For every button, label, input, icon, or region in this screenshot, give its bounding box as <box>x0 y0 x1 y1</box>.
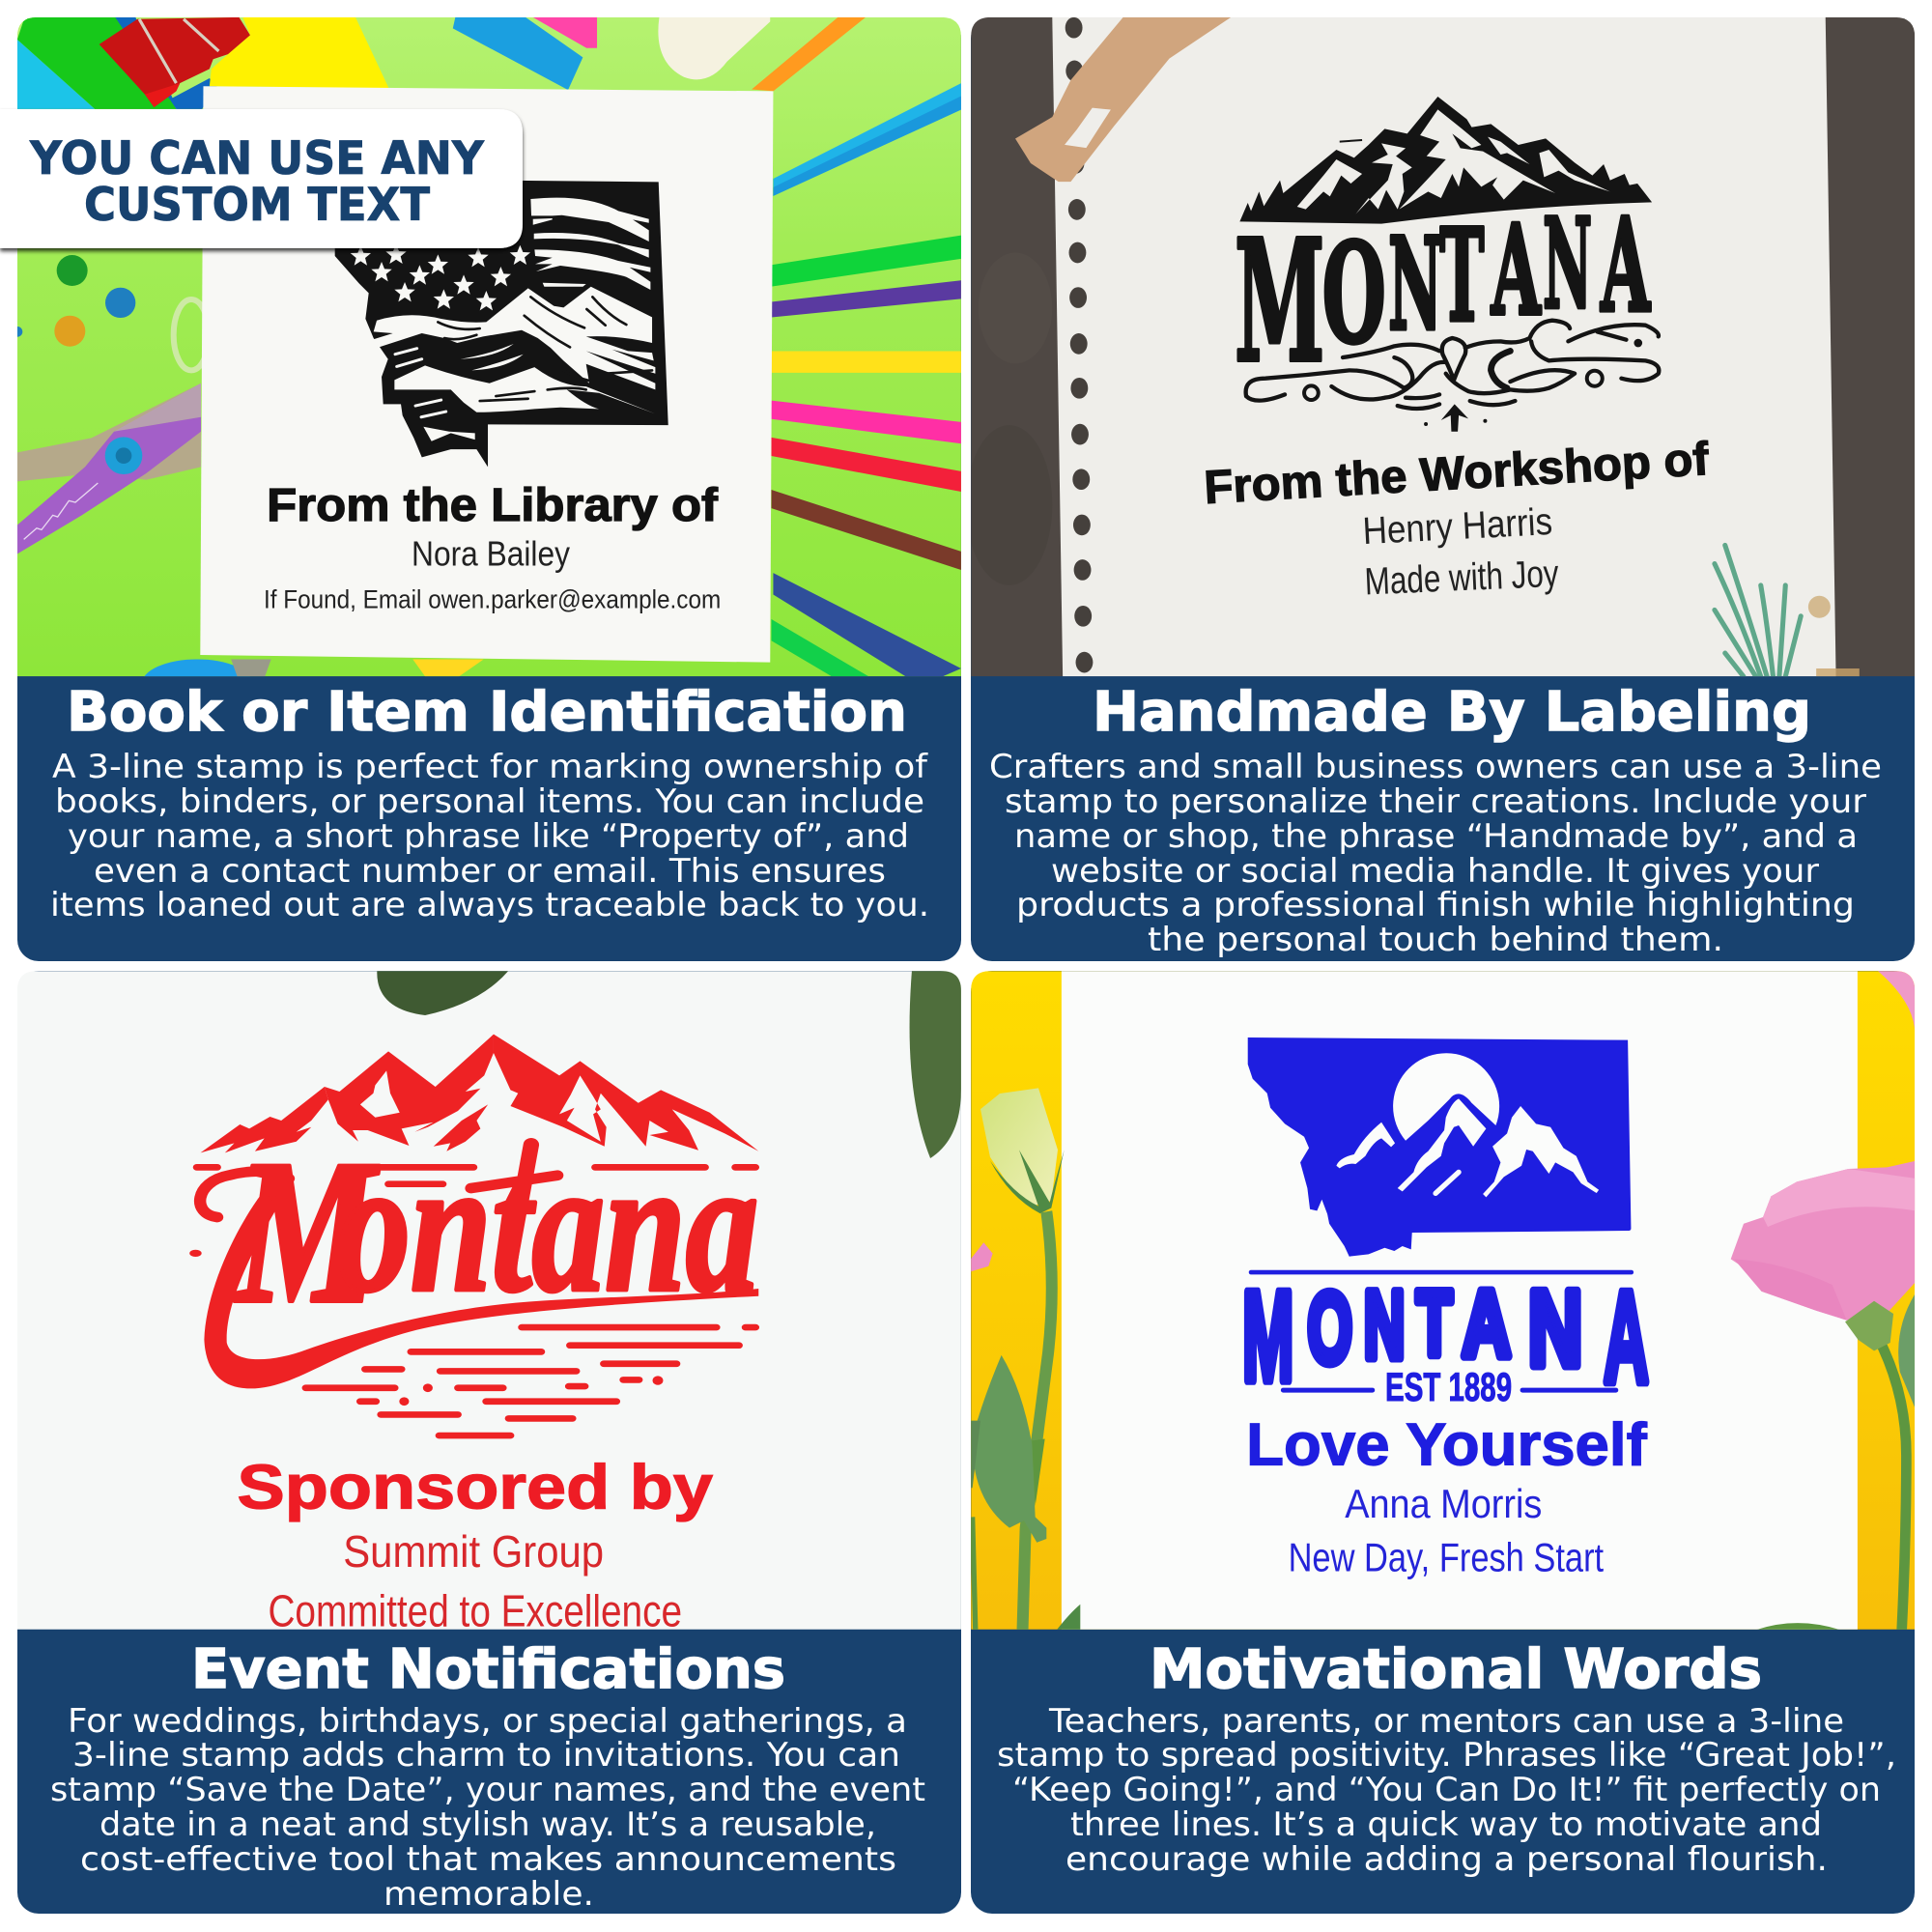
photo: white paper with red Montana stamp: Summit Group <box>343 1526 604 1577</box>
photo: notebook paper with black Montana stamp: A <box>1491 198 1542 344</box>
photo: white paper with red Montana stamp <box>17 971 961 1636</box>
photo: notebook paper with black Montana stamp: O <box>1322 213 1386 374</box>
heading: Motivational Words: Motivational Words <box>1150 1638 1762 1701</box>
photo: white paper with red Montana stamp: M <box>234 1118 380 1347</box>
photo: paper on yellow with flowers and blue Montana stamp: Love Yourself <box>1246 1412 1647 1479</box>
photo: notebook paper with black Montana stamp: N <box>1388 210 1442 359</box>
photo: white paper with red Montana stamp: Committed to Excellence <box>268 1586 682 1636</box>
panel: Motivational Words <box>971 971 1916 1914</box>
callout: you can use any custom text: CUSTOM TEXT <box>84 179 430 232</box>
photo: notebook paper with black Montana stamp <box>966 17 1915 676</box>
photo: paper on yellow with flowers and blue Montana stamp: N <box>1364 1271 1405 1378</box>
text block: book description <box>50 748 929 924</box>
photo: stationery with black flag stamp: If Found, Email owen.parker@example.com <box>264 585 721 614</box>
photo: paper on yellow with flowers and blue Montana stamp: EST 1889 <box>1385 1364 1512 1409</box>
text block: handmade description: stamp to personalize their creations. Include your <box>1005 782 1866 821</box>
text block: book description: even a contact number or email. This ensures <box>94 852 886 891</box>
text block: motivational description: three lines. It’s a quick way to motivate and <box>1070 1805 1822 1844</box>
text block: handmade description: products a professional finish while highlighting <box>1016 886 1855 924</box>
photo: notebook paper with black Montana stamp: M <box>1235 203 1324 400</box>
text block: motivational description: “Keep Going!”, and “You Can Do It!” fit perfectly on <box>1012 1771 1881 1809</box>
text block: handmade description <box>989 748 1882 959</box>
photo: paper on yellow with flowers and blue Montana stamp: Anna Morris <box>1345 1481 1542 1526</box>
photo: notebook paper with black Montana stamp: From the Workshop of <box>1203 433 1711 514</box>
photo: stationery with black flag stamp: Nora Bailey <box>412 535 570 574</box>
callout: you can use any custom text <box>0 109 523 248</box>
panel: Event Notifications <box>17 971 961 1914</box>
photo: notebook paper with black Montana stamp: Henry Harris <box>1362 500 1553 553</box>
callout: you can use any custom text: YOU CAN USE ANY <box>29 132 485 185</box>
text block: book description: items loaned out are always traceable back to you. <box>50 886 929 924</box>
photo: stationery with black flag stamp: From the Library of <box>267 479 719 531</box>
photo: paper on yellow with flowers and blue Montana stamp: N <box>1528 1268 1582 1389</box>
text block: book description: your name, a short phrase like “Property of”, and <box>68 817 909 856</box>
heading: Event Notifications: Event Notifications <box>191 1638 785 1701</box>
photo: white paper with red Montana stamp: Sponsored by <box>238 1451 713 1521</box>
photo: white paper with red Montana stamp: ontana <box>338 1122 758 1331</box>
photo: paper on yellow with flowers and blue Montana stamp: New Day, Fresh Start <box>1289 1534 1604 1579</box>
text block: book description: A 3-line stamp is perfect for marking ownership of <box>52 748 928 786</box>
text block: handmade description: name or shop, the phrase “Handmade by”, and a <box>1014 817 1858 856</box>
photo: paper on yellow with flowers and blue Montana stamp: M <box>1242 1265 1293 1408</box>
photo: notebook paper with black Montana stamp: Made with Joy <box>1364 553 1560 603</box>
text block: event description: cost-effective tool that makes announcements <box>80 1840 896 1879</box>
photo: paper on yellow with flowers and blue Montana stamp <box>971 971 1916 1637</box>
text block: motivational description: stamp to spread positivity. Phrases like “Great Job!”, <box>997 1736 1896 1775</box>
text block: motivational description: Teachers, parents, or mentors can use a 3-line <box>1048 1702 1844 1741</box>
photo: paper on yellow with flowers and blue Montana stamp: O <box>1307 1272 1352 1384</box>
text block: event description: stamp “Save the Date”, your names, and the event <box>50 1771 925 1809</box>
text block: handmade description: Crafters and small business owners can use a 3-line <box>989 748 1882 786</box>
photo: notebook paper with black Montana stamp: N <box>1543 191 1592 337</box>
photo: paper on yellow with flowers and blue Montana stamp: T <box>1416 1272 1452 1375</box>
photo: notebook paper with black Montana stamp: A <box>1600 190 1651 341</box>
panel: Handmade By Labeling <box>966 17 1915 961</box>
text block: event description: date in a neat and stylish way. It’s a reusable, <box>99 1805 876 1844</box>
text block: motivational description: encourage while adding a personal flourish. <box>1065 1840 1828 1879</box>
text block: event description <box>50 1702 925 1914</box>
text block: book description: books, binders, or personal items. You can include <box>55 782 924 821</box>
text block: handmade description: the personal touch behind them. <box>1148 921 1723 959</box>
text block: handmade description: website or social media handle. It gives your <box>1051 852 1819 891</box>
text block: event description: For weddings, birthdays, or special gatherings, a <box>68 1702 907 1741</box>
text block: event description: memorable. <box>384 1875 594 1914</box>
text block: event description: 3-line stamp adds charm to invitations. You can <box>72 1736 900 1775</box>
heading: Book or Item Identification: Book or Item Identification <box>67 681 907 744</box>
photo: notebook paper with black Montana stamp: T <box>1439 201 1484 351</box>
panel: Book or Item Identification <box>13 17 961 961</box>
text block: motivational description <box>997 1702 1896 1879</box>
photo: paper on yellow with flowers and blue Montana stamp: A <box>1462 1271 1511 1377</box>
heading: Handmade By Labeling: Handmade By Labeling <box>1093 681 1811 744</box>
photo: paper on yellow with flowers and blue Montana stamp: A <box>1604 1264 1649 1409</box>
photo: stationery with black flag stamp <box>13 17 961 708</box>
